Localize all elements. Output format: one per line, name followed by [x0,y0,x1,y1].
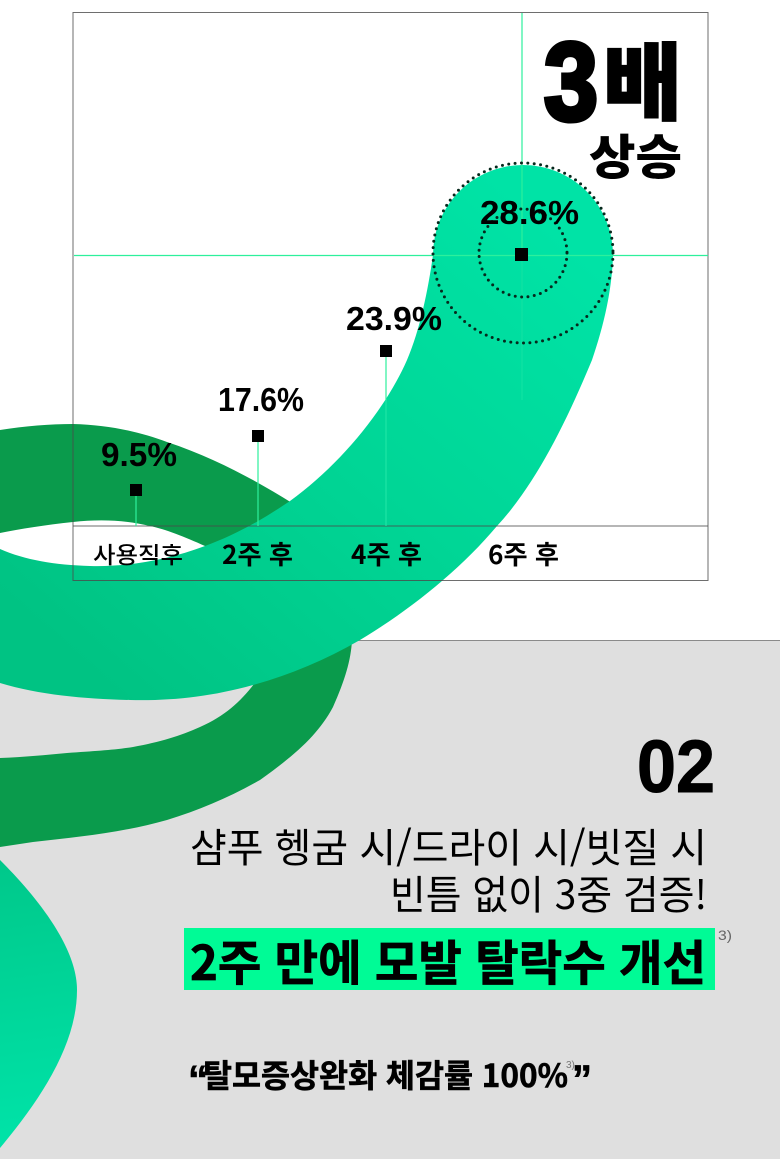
quote: 3) [566,1060,575,1071]
dotted circle: inner [479,209,567,297]
ribbon: dark green upper loop [0,424,292,560]
dotted circle: outer [433,163,613,343]
chart guide lines [74,13,708,526]
data marker: 사용직후 [130,484,142,496]
quote: ” [572,1058,592,1102]
ribbon: bright green lower left curve [0,860,77,1148]
chart frame [73,12,708,580]
gray background panel [0,640,780,1159]
footnote mark: 3) [718,927,732,943]
data marker: 6주 후 [515,248,528,261]
value label 17.6%: 17.6% [218,381,304,418]
axis label 6주 후: 6주 후 [488,535,559,572]
headline 3배: 3 [544,21,598,144]
value label 23.9%: 23.9% [346,300,442,337]
data marker: 2주 후 [252,430,264,442]
axis label 사용직후: 사용직후 [93,536,183,570]
ribbon: bright green main curve [0,165,613,700]
headline 상승: 상승 [589,118,682,188]
section number 02: 02 [637,725,715,808]
headline 3배: 배 [603,17,682,138]
axis label 4주 후: 4주 후 [351,535,422,572]
quote: 탈모증상완화 체감률 100% [203,1051,568,1097]
value label 9.5%: 9.5% [101,436,177,473]
subheading line 2: 빈틈 없이 3중 검증! [390,863,707,921]
value label 28.6%: 28.6% [480,194,579,231]
axis label 2주 후: 2주 후 [222,535,293,572]
headline 3배 [544,17,682,144]
subheading line 1: 샴푸 헹굼 시/드라이 시/빗질 시 [190,816,707,874]
data marker: 4주 후 [380,345,392,357]
highlighted headline: 2주 만에 모발 탈락수 개선 [190,924,706,994]
quote: “ [188,1058,208,1102]
ribbon: dark green lower band [0,640,352,847]
